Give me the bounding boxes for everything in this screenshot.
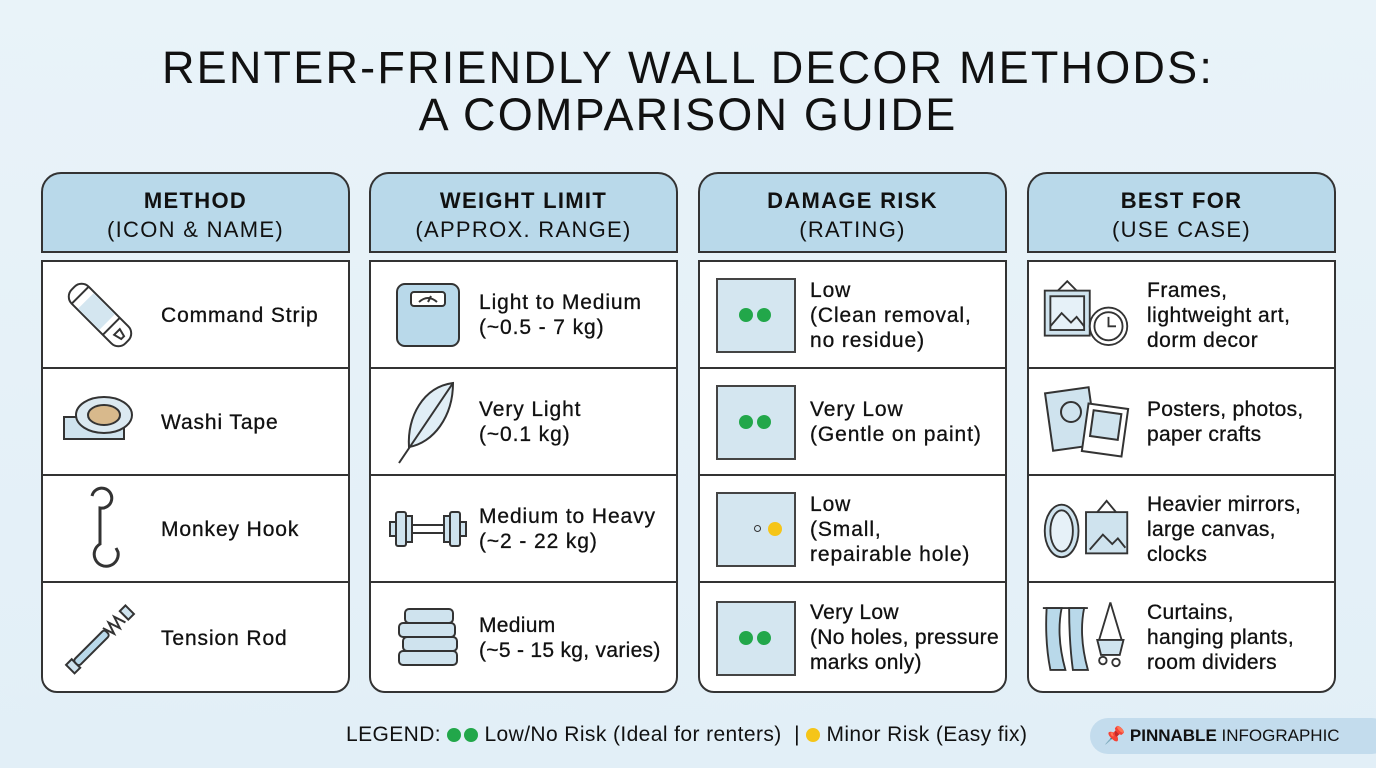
text: no residue): [810, 329, 925, 352]
header: method: [41, 172, 350, 253]
icon: dumbbell: [389, 511, 467, 547]
panel: weight limit: [369, 172, 678, 693]
icon: mirror and canvas: [1044, 499, 1128, 558]
panel: method: [41, 172, 350, 693]
icon: green dots: [716, 601, 796, 676]
text: (~2 - 22 kg): [479, 530, 598, 553]
badge: pinnable infographic: 📌 PINNABLE INFOGRAPHIC: [1104, 726, 1340, 745]
text: repairable hole): [810, 543, 970, 566]
header: best for: BEST FOR: [1121, 188, 1242, 213]
text: Heavier mirrors,: [1147, 493, 1301, 516]
icon: curtains and plant: [1042, 602, 1125, 671]
header: damage: DAMAGE RISK: [767, 188, 938, 213]
text: (Clean removal,: [810, 304, 972, 327]
text: (No holes, pressure: [810, 626, 999, 649]
title: [162, 42, 1214, 140]
icon: yellow dot with hole: [716, 492, 796, 567]
panel: best for: [1027, 172, 1336, 693]
text: (Small,: [810, 518, 882, 541]
text: Low: [810, 279, 851, 302]
text: Monkey Hook: [161, 518, 299, 541]
legend: LEGEND: Low/No Risk (Ideal for renters) | Minor Risk (Easy fix): [346, 723, 1027, 746]
header: damage: (RATING): [799, 217, 906, 242]
icon: green dots: [716, 278, 796, 353]
text: (~0.5 - 7 kg): [479, 316, 604, 339]
header: weight: [369, 172, 678, 253]
text: (Gentle on paint): [810, 423, 982, 446]
title: RENTER-FRIENDLY WALL DECOR METHODS:: [162, 42, 1214, 93]
header: weight: WEIGHT LIMIT: [440, 188, 607, 213]
icon: command strip: [68, 282, 132, 348]
text: clocks: [1147, 543, 1207, 566]
text: Frames,: [1147, 279, 1228, 302]
text: Light to Medium: [479, 291, 642, 314]
text: large canvas,: [1147, 518, 1276, 541]
header: best for: [1027, 172, 1336, 253]
text: Command Strip: [161, 304, 319, 327]
text: Very Low: [810, 601, 899, 624]
text: dorm decor: [1147, 329, 1258, 352]
text: Very Low: [810, 398, 904, 421]
text: Curtains,: [1147, 601, 1234, 624]
text: paper crafts: [1147, 423, 1262, 446]
text: Low: [810, 493, 851, 516]
icon: posters photos: [1044, 386, 1130, 458]
header: best for: (USE CASE): [1112, 217, 1251, 242]
icon: green dots: [716, 385, 796, 460]
text: Medium to Heavy: [479, 505, 656, 528]
icon: frame and clock: [1044, 280, 1128, 346]
text: Very Light: [479, 398, 581, 421]
text: (~0.1 kg): [479, 423, 571, 446]
icon: tension rod: [64, 604, 136, 675]
header: method: (ICON & NAME): [107, 217, 284, 242]
header: weight: (APPROX. RANGE): [415, 217, 632, 242]
text: lightweight art,: [1147, 304, 1290, 327]
icon: scale: [396, 283, 460, 347]
text: (~5 - 15 kg, varies): [479, 639, 661, 662]
text: Washi Tape: [161, 411, 279, 434]
text: marks only): [810, 651, 922, 674]
icon: monkey hook: [90, 486, 120, 568]
icon: feather: [398, 382, 454, 464]
text: Posters, photos,: [1147, 398, 1304, 421]
title: A COMPARISON GUIDE: [419, 89, 957, 140]
header: damage: [698, 172, 1007, 253]
icon: books: [398, 608, 458, 666]
text: hanging plants,: [1147, 626, 1294, 649]
text: room dividers: [1147, 651, 1277, 674]
text: Tension Rod: [161, 627, 288, 650]
icon: washi tape: [63, 396, 133, 440]
badge: pinnable infographic: [1090, 718, 1376, 754]
text: Medium: [479, 614, 556, 637]
panel: damage risk: [698, 172, 1007, 693]
header: method: METHOD: [144, 188, 247, 213]
